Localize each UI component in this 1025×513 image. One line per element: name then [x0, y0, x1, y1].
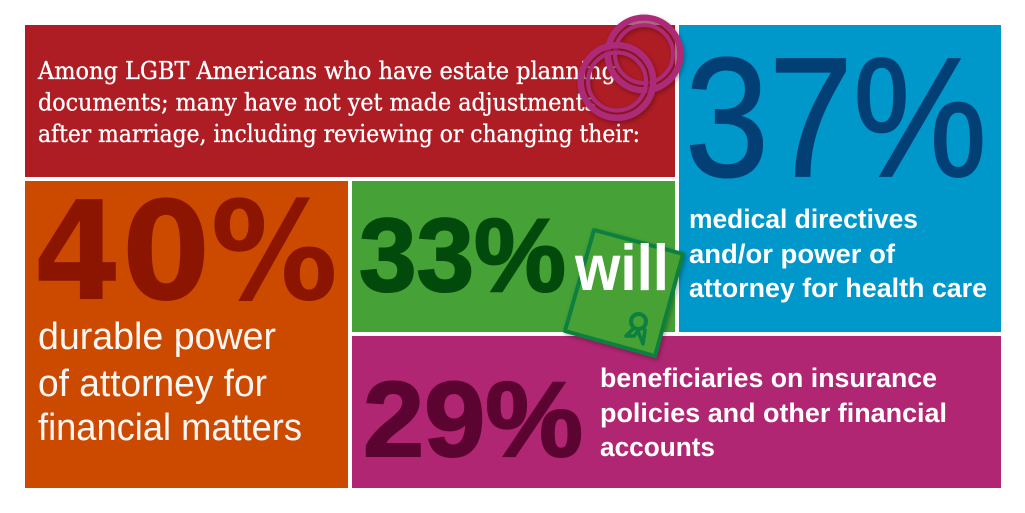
panel: 29 percent [352, 336, 1001, 488]
panel: 40 percent [25, 173, 348, 488]
stat: 29%: 29% [363, 359, 583, 479]
label: medical directives: attorney for health care [689, 273, 987, 303]
label: durable power [38, 316, 302, 449]
label: beneficiaries: accounts [600, 432, 715, 462]
label: beneficiaries [600, 363, 947, 462]
label: medical directives [689, 204, 987, 303]
intro text: after marriage, including reviewing or changing their: [38, 119, 640, 148]
label: medical directives: and/or power of [689, 239, 895, 269]
icon: ribbon seal [626, 314, 646, 344]
intro text: documents; many have not yet made adjustments [38, 88, 596, 116]
stat: 33%: 33% [359, 198, 566, 314]
label: beneficiaries: policies and other financial [600, 398, 947, 428]
label: durable power: of attorney for [38, 363, 267, 405]
stat: 40%: 40% [33, 173, 338, 332]
panel: 33 percent [352, 181, 675, 332]
label: durable power: durable power [38, 316, 276, 358]
panel: 37 percent [679, 23, 1001, 332]
panel: intro [25, 25, 675, 177]
label: medical directives: medical directives [689, 204, 918, 234]
icon: wedding rings [581, 18, 680, 118]
icon: will document [565, 230, 683, 356]
intro text: Among LGBT Americans who have estate planning [37, 56, 616, 85]
intro text [37, 56, 640, 148]
label: beneficiaries: beneficiaries on insurance [600, 363, 937, 393]
label: will: will [574, 231, 669, 304]
label: durable power: financial matters [38, 407, 302, 449]
stat: 37%: 37% [685, 23, 987, 213]
